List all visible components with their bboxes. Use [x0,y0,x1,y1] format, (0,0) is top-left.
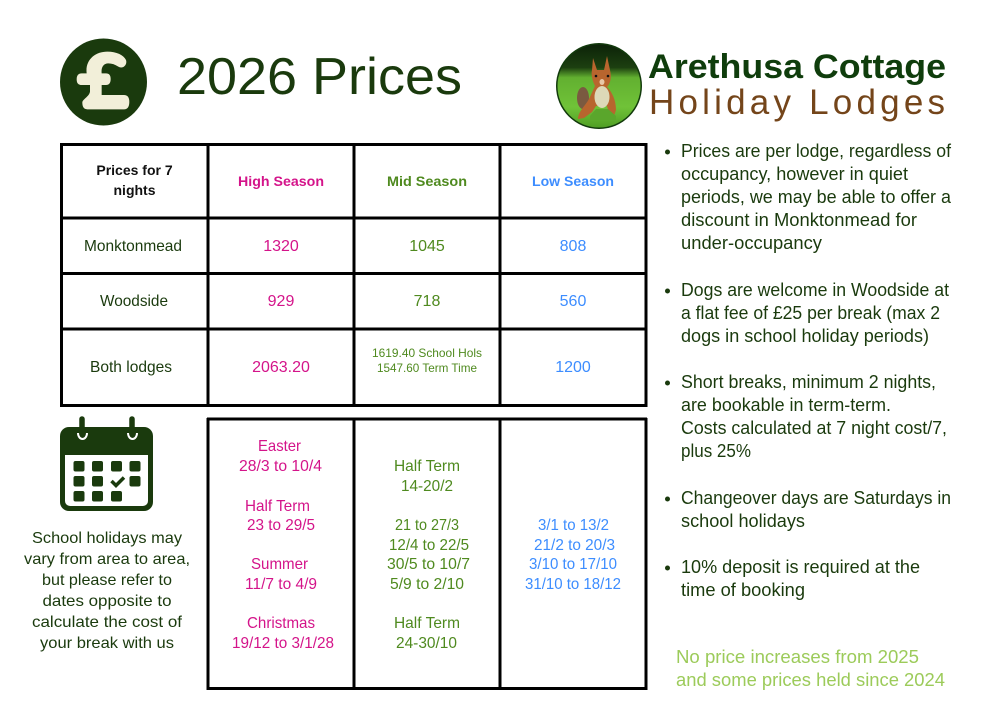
mid season dates: 5/9 to 2/10 [390,576,464,593]
row: Both lodges: 1547.60 Term Time [377,361,477,375]
table header row: Mid Season [387,173,467,189]
price table [61,143,647,407]
table header row: High Season [238,173,324,189]
logo: Arethusa Cottage Holiday Lodges [556,43,946,129]
bullet: changeover days [665,488,951,531]
school holidays note: dates opposite to [42,593,172,610]
high season dates: 28/3 to 10/4 [239,458,322,475]
high season dates: Christmas [247,615,315,632]
high season dates: Half Term [245,498,310,515]
icon: red squirrel photo [556,43,642,129]
icon: calendar [60,419,153,511]
school holidays note: calculate the cost of [32,614,183,631]
high season dates: 23 to 29/5 [247,517,315,534]
school holidays note: School holidays may [32,530,182,547]
high season dates: Summer [251,556,309,573]
mid season dates [387,458,470,652]
bullet: short breaks: are bookable in term-term. [681,395,891,415]
row: Monktonmead: 808 [560,238,586,255]
high season dates: Easter [258,438,302,455]
mid season dates: 14-20/2 [401,478,453,495]
row: Woodside: 718 [414,293,440,310]
high season dates [232,438,334,652]
mid season dates: 30/5 to 10/7 [387,556,470,573]
bullet: dogs: Dogs are welcome in Woodside at [681,280,949,300]
title: 2026 Prices [177,48,462,106]
bullet: per lodge pricing [665,141,952,253]
row: Both lodges: 1619.40 School Hols [372,346,482,360]
bullet: changeover days: Changeover days are Saturdays in [681,488,951,508]
bullet: per lodge pricing: Prices are per lodge, regardless of [681,141,952,161]
bullet: per lodge pricing: under-occupancy [681,233,822,253]
low season dates: 3/1 to 13/2 [538,517,609,534]
school holidays note: your break with us [40,635,174,652]
mid season dates: 21 to 27/3 [395,517,459,534]
row: Woodside: 560 [560,293,586,310]
logo: Arethusa Cottage Holiday Lodges: Holiday Lodges [649,83,945,122]
dates table [207,418,647,690]
bullet: changeover days: school holidays [681,511,805,531]
row: Both lodges [90,346,591,376]
high season dates: 19/12 to 3/1/28 [232,635,334,652]
icon: pound coin [60,38,147,126]
bullet: dogs [665,280,949,346]
bullet: short breaks: plus 25% [681,441,751,461]
table header row: nights [114,182,156,198]
table header row: Prices for 7 [96,162,173,178]
bullet: dogs: dogs in school holiday periods) [681,326,929,346]
high season dates: 11/7 to 4/9 [245,576,317,593]
bullet: per lodge pricing: discount in Monktonmead for [681,210,917,230]
mid season dates: 12/4 to 22/5 [389,537,469,554]
bullet: per lodge pricing: occupancy, however in quiet [681,164,908,184]
row: Both lodges: 1200 [555,359,591,376]
school holidays note: vary from area to area, [24,551,190,568]
logo: Arethusa Cottage Holiday Lodges: Arethusa Cottage [648,48,946,86]
row: Monktonmead [84,238,586,255]
table header row [96,162,614,198]
table header row: Low Season [532,173,614,189]
low season dates: 21/2 to 20/3 [534,537,615,554]
mid season dates: 24-30/10 [396,635,457,652]
price increase note: No price increases from 2025 [676,646,919,667]
low season dates: 31/10 to 18/12 [525,576,621,593]
row: Monktonmead: 1045 [409,238,445,255]
bullet: deposit [665,557,920,600]
row: Woodside: 929 [268,293,294,310]
bullet list: terms [665,141,952,600]
row: Woodside: Woodside [100,293,168,310]
bullet: short breaks: Short breaks, minimum 2 nights, [681,372,936,392]
bullet: dogs: a flat fee of £25 per break (max 2 [681,303,940,323]
bullet: short breaks [665,372,947,461]
bullet: short breaks: Costs calculated at 7 night cost/7, [681,418,947,438]
row: Monktonmead: Monktonmead [84,238,182,255]
bullet: deposit: 10% deposit is required at the [681,557,920,577]
row: Woodside [100,293,586,310]
school holidays note: but please refer to [42,572,172,589]
school holidays note [24,530,190,652]
bullet: per lodge pricing: periods, we may be able to offer a [681,187,952,207]
row: Both lodges: 2063.20 [252,359,310,376]
mid season dates: Half Term [394,615,460,632]
mid season dates: Half Term [394,458,460,475]
row: Both lodges: Both lodges [90,359,172,376]
low season dates [525,517,621,593]
price increase note: and some prices held since 2024 [676,669,945,690]
low season dates: 3/10 to 17/10 [529,556,617,573]
price increase note [676,646,945,690]
row: Monktonmead: 1320 [263,238,299,255]
bullet: deposit: time of booking [681,580,805,600]
